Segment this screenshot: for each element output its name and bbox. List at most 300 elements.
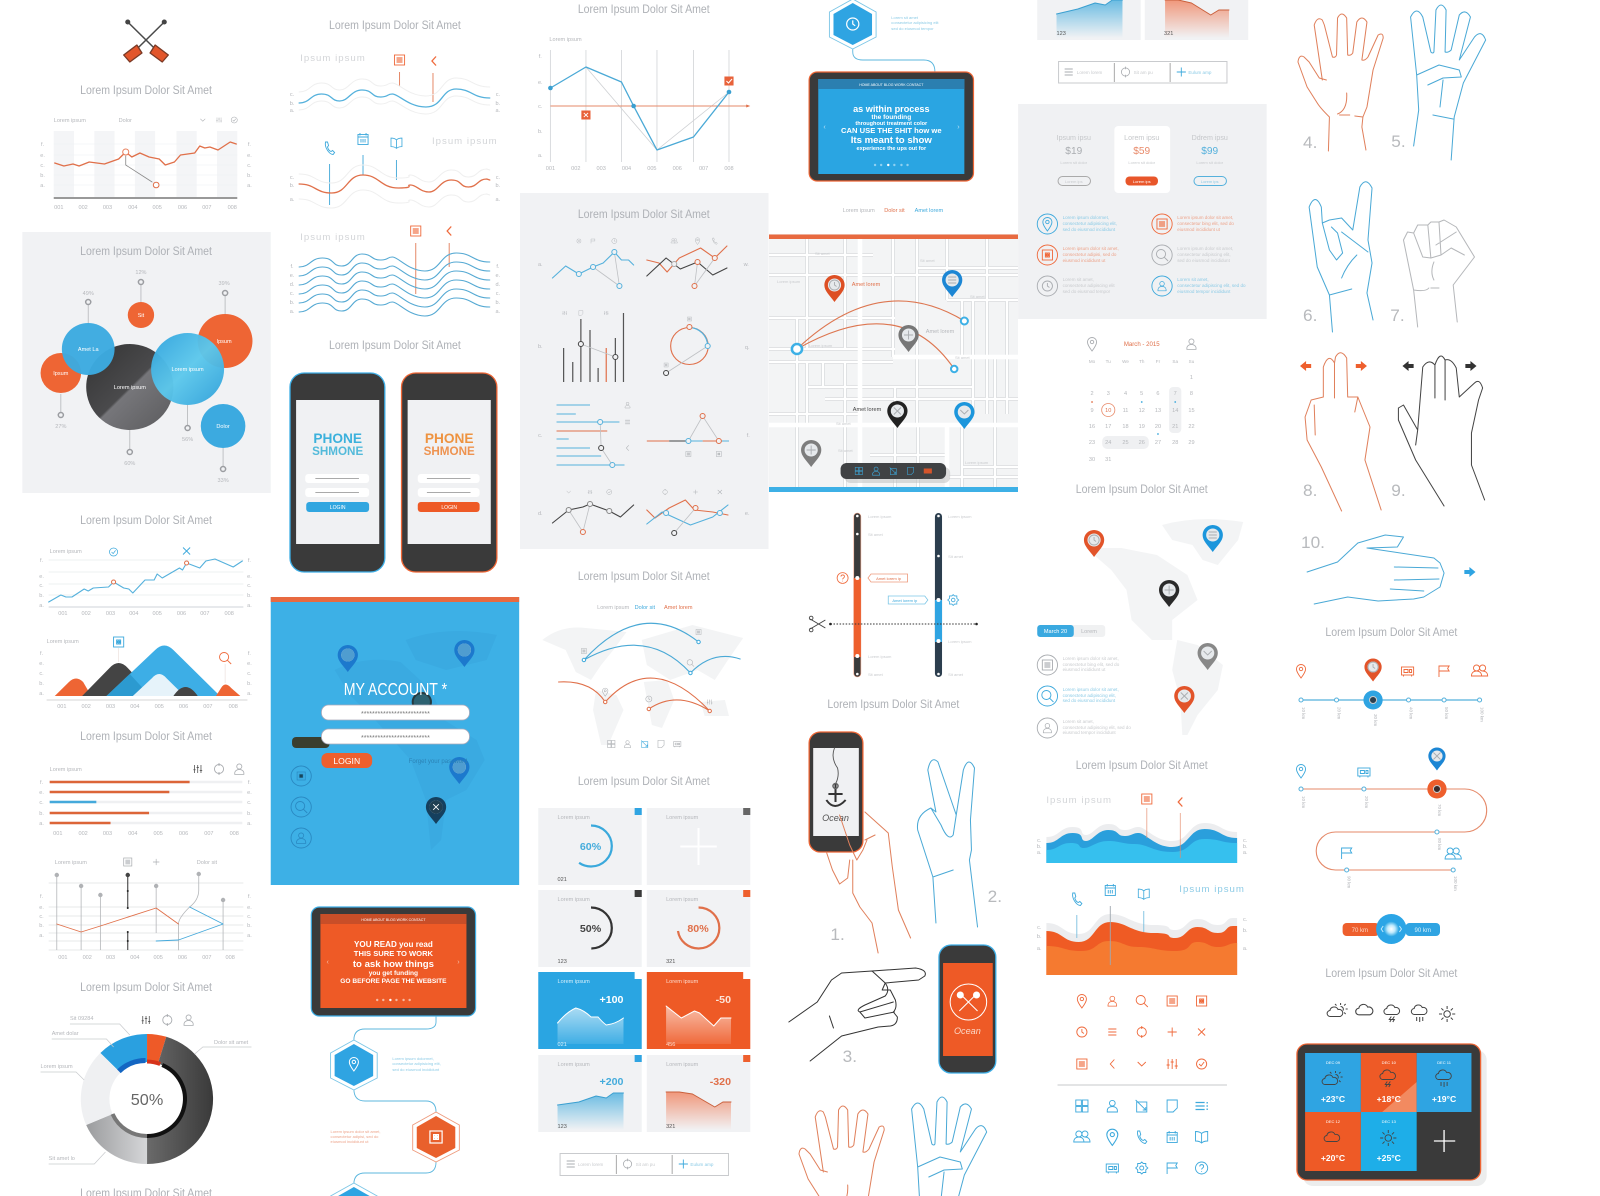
map route arcs — [797, 301, 964, 369]
stat cards grid — [538, 808, 750, 1132]
tablet: orange word cloud: › — [457, 959, 460, 966]
chart: orange line with bands — [40, 117, 252, 211]
card: -50: Lorem ipsum — [666, 979, 699, 985]
gesture 6 hand — [1309, 182, 1373, 332]
chart: orange wave with markers: c. — [290, 175, 295, 181]
calendar: 7 — [1174, 391, 1177, 397]
legend: tablet: Amet lorem — [915, 208, 944, 214]
area chart: orange: c. — [1243, 917, 1248, 923]
tablet: blue word cloud: CAN USE THE SHIT how we — [841, 126, 942, 135]
chart: horizontal bars: c. — [39, 800, 44, 806]
weather cell: Dec 11: +19°C — [1432, 1094, 1456, 1104]
small slider notes: Lorem ipsum — [868, 654, 892, 659]
calendar: Su — [1189, 359, 1195, 364]
area chart: orange: c. — [1037, 925, 1042, 931]
chart: six blue waves: a. — [290, 309, 295, 315]
timeline sliders — [809, 513, 978, 677]
chart: horizontal bars: 002 — [79, 831, 88, 837]
phone: orange ocean: Ocean — [954, 1026, 981, 1036]
chart: mountains — [39, 637, 252, 710]
calendar: 23 — [1089, 440, 1095, 446]
card: 50%: 123 — [558, 959, 567, 965]
login button — [321, 753, 372, 768]
small slider notes: Sit amet — [948, 554, 964, 559]
chart: horizontal bars: 005 — [154, 831, 163, 837]
chart: lollipop lines: e. — [39, 905, 44, 911]
chart: donut 50%: Lorem ipsum — [41, 1064, 73, 1070]
login fields: ************************* — [361, 711, 430, 718]
calendar: 20 — [1155, 424, 1161, 430]
numbers 4 to 7: 6. — [1303, 306, 1317, 325]
chart: blue wave with markers: Ipsum ipsum — [300, 53, 366, 64]
bubble: Lorem ipsum blue — [151, 333, 224, 405]
plan: $19: Lorem ips — [1065, 179, 1083, 184]
slider: orange — [854, 513, 861, 677]
chart: blue trend line: f. — [40, 558, 44, 564]
calendar: 17 — [1105, 424, 1111, 430]
route timeline 1: 100 km — [1480, 707, 1485, 722]
slider: blue — [935, 513, 942, 677]
button bar bottom — [560, 1154, 728, 1176]
chart: orange line with bands: 001 — [54, 205, 63, 211]
card: +200: Lorem ipsum — [558, 1062, 590, 1068]
chart: bubble diagram: 12% — [135, 270, 147, 276]
dashed cut line — [829, 623, 978, 625]
mini chart b: vertical bars: b. — [538, 344, 543, 350]
card: 80%: 80% — [687, 923, 709, 935]
heading: line and mountains: Lorem Ipsum Dolor Sit Amet — [80, 515, 213, 527]
chart: orange line with bands: 007 — [202, 205, 211, 211]
phone: blue login: PHONE — [313, 431, 362, 446]
chart: horizontal bars: f. — [248, 780, 251, 786]
heading: area charts: Lorem Ipsum Dolor Sit Amet — [1076, 760, 1208, 772]
numbers 8 and 9: 8. — [1303, 481, 1317, 500]
hexagon: pin — [331, 1040, 377, 1090]
calendar: 21 — [1172, 424, 1178, 430]
chart: six blue waves — [290, 226, 501, 316]
map base: streets: Sit amet — [815, 251, 831, 256]
chart: orange wave with markers: a. — [290, 197, 295, 203]
map pin: black — [853, 401, 908, 428]
chart: mountains: 006 — [179, 704, 188, 710]
chart: lollipop lines: e. — [247, 905, 252, 911]
phone: orange login — [402, 373, 497, 572]
chart: horizontal bars: 003 — [103, 831, 112, 837]
gesture 10 hand: 10. — [1301, 533, 1325, 552]
calendar: 14 — [1172, 408, 1178, 414]
weather cell: Dec 11: DEC 11 — [1437, 1060, 1452, 1065]
pricing features: consectetur adipisi, sed do — [1063, 252, 1117, 257]
route timeline 2: 20 km — [1364, 796, 1369, 808]
chart: lollipop lines: Lorem ipsum — [55, 860, 87, 866]
route timeline 2: 10 km — [1301, 796, 1306, 808]
map base: streets: Sit amet — [838, 448, 854, 453]
chart: horizontal bars: 006 — [179, 831, 188, 837]
small slider notes: Lorem ipsum — [948, 514, 972, 519]
heading: waves: Lorem Ipsum Dolor Sit Amet — [329, 20, 462, 32]
calendar: 3 — [1107, 391, 1110, 397]
chart: lollipop lines: 002 — [83, 955, 92, 961]
tablet: orange word cloud: ‹ — [327, 959, 330, 966]
hexagon: clock: sed do eiusmod tempor — [891, 26, 934, 31]
map base: streets: Sit amet — [955, 355, 971, 360]
chart: orange line with bands: a. — [247, 183, 252, 189]
mini chart e: e. — [745, 511, 750, 517]
chart: bubble diagram: Amet La — [78, 347, 99, 353]
tablet: blue word cloud: Its meant to show — [851, 135, 932, 146]
heading: world arcs: Lorem Ipsum Dolor Sit Amet — [578, 571, 710, 583]
chart: orange wave with markers: a. — [496, 197, 501, 203]
card: 50% — [538, 890, 642, 967]
map list: eiusmod tempor incididunt — [1063, 730, 1116, 735]
chart: bubble diagram: Dolor — [216, 424, 230, 430]
tablet: orange word cloud: YOU READ you read — [354, 940, 433, 949]
pricing features: eiusmod tempor incididunt — [1177, 289, 1231, 294]
area chart: orange: a. — [1243, 946, 1248, 952]
heading: route: Lorem Ipsum Dolor Sit Amet — [1325, 627, 1458, 639]
small slider notes: Sit amet — [868, 672, 884, 677]
map pin: gray — [898, 325, 955, 352]
tablet: blue word cloud: ‹ — [823, 124, 826, 131]
chart: mountains: f. — [248, 651, 251, 657]
donut segment: gray — [86, 1114, 147, 1164]
bubble: Sit — [128, 302, 154, 328]
card: +100: Lorem ipsum — [558, 979, 590, 985]
calendar: 15 — [1188, 408, 1195, 414]
map silhouette — [542, 625, 743, 745]
button bar bottom: Eulum amp — [690, 1162, 714, 1167]
plan: $59: Lorem sit dolor — [1128, 160, 1156, 165]
map silhouette — [1086, 519, 1243, 735]
pin world map — [1037, 519, 1243, 738]
chart: six blue waves: c. — [290, 291, 295, 297]
chart: horizontal bars: 004 — [128, 831, 137, 837]
map overlay: routes and pins — [792, 270, 974, 483]
chart: donut 50% — [41, 1014, 251, 1164]
chart: bubble diagram: 33% — [218, 478, 229, 484]
route timeline 2 — [1296, 748, 1487, 891]
card: 60%: 021 — [558, 877, 567, 883]
chart: mountains: a. — [39, 691, 44, 697]
chart: mountains: e. — [247, 661, 252, 667]
chart: blue trend line: 007 — [200, 611, 209, 617]
chart: orange line with bands: Dolor — [119, 118, 132, 124]
pricing features: Lorem ipsum dolor sit amet, — [1063, 246, 1119, 251]
tablet: orange word cloud: to ask how things — [353, 959, 434, 970]
mini chart f: triangle: f. — [747, 433, 750, 439]
heading: my account: MY ACCOUNT * — [344, 679, 447, 699]
area chart: orange: b. — [1037, 934, 1042, 940]
gesture 4 hand — [1298, 14, 1383, 151]
mini chart d — [538, 490, 634, 534]
map list: consectetur bing elit, sed do — [1063, 662, 1120, 667]
card: +200: +200 — [600, 1076, 624, 1088]
plan: $59 — [1124, 135, 1159, 186]
icon set: blue — [1074, 1100, 1208, 1174]
calendar: 2 — [1090, 391, 1094, 397]
area chart: blue — [1037, 794, 1248, 863]
weather tablet — [1297, 1044, 1487, 1186]
plan: $99: Lorem sit dolor — [1196, 160, 1224, 165]
tag: orange: Amet lorem ip — [876, 576, 902, 581]
calendar: 30 — [1089, 457, 1095, 463]
pricing features: Lorem ipsum dolor sit amet, — [1177, 215, 1233, 220]
chart: orange line with bands: f. — [248, 142, 251, 148]
calendar: 31 — [1105, 457, 1111, 463]
heading: column 3 top: Lorem Ipsum Dolor Sit Amet — [578, 4, 710, 16]
card: add: Lorem ipsum — [666, 815, 699, 821]
card: -320: Lorem ipsum — [666, 1062, 699, 1068]
chart: blue trend line: 005 — [153, 611, 162, 617]
text: hexagon grid: Lorem ipsum dolor sit amet, — [331, 1129, 380, 1134]
plan: $59: Lorem ipsu — [1124, 135, 1159, 142]
gesture 1: phone in hand: Ocean — [822, 813, 849, 823]
mini chart q: ring — [664, 317, 750, 376]
tablet: orange word cloud: you get funding — [369, 970, 418, 977]
card: add — [647, 808, 750, 885]
chart: lollipop lines: b. — [247, 923, 252, 929]
calendar: 1 — [1190, 375, 1193, 381]
mini chart c: bars — [538, 402, 630, 468]
chart: lollipop lines: f. — [40, 894, 44, 900]
chart: blue trend line: Lorem ipsum — [50, 549, 82, 555]
panel: pricing background — [1018, 104, 1267, 319]
chart: donut 50%: Sit amet lo — [49, 1156, 75, 1162]
map base: streets — [769, 234, 1018, 492]
heading: phones: Lorem Ipsum Dolor Sit Amet — [329, 340, 462, 352]
chart: horizontal bars: f. — [40, 780, 44, 786]
text: hexagon grid: eiusmod incididunt ut — [331, 1139, 369, 1144]
chart: six blue waves: d. — [290, 282, 295, 288]
calendar: 4 — [1124, 391, 1127, 397]
chart: lollipop lines: a. — [39, 933, 44, 939]
chart: blue wave with markers: b. — [496, 101, 501, 107]
heading: bars: Lorem Ipsum Dolor Sit Amet — [80, 731, 213, 743]
weather cell: Dec 10: +18°C — [1377, 1094, 1401, 1104]
calendar: 27 — [1155, 440, 1161, 446]
button bar top: Eulum amp — [1188, 70, 1212, 75]
map pin: blue lower — [954, 402, 974, 429]
donut segment: light — [81, 1053, 120, 1125]
weather cell: Dec 09: +23°C — [1321, 1094, 1345, 1104]
map pin: gray lower — [801, 440, 821, 467]
text: hexagon pin — [392, 1056, 441, 1072]
weather cell: Dec 10 — [1361, 1053, 1417, 1112]
mini chart f: triangle — [647, 414, 750, 456]
login fields — [321, 705, 469, 744]
bubble: Ipsum right — [198, 314, 252, 368]
stat cards top repeat: 123 — [1057, 31, 1066, 37]
chart: bubble diagram: Lorem ipsum — [114, 385, 146, 391]
map base: streets: Lorem ipsum — [809, 343, 833, 348]
area chart: orange: b. — [1243, 928, 1248, 934]
area chart: blue: b. — [1037, 844, 1042, 850]
map base: streets: Lorem ipsum — [965, 460, 989, 465]
chart: mountains: Lorem ipsum — [47, 639, 79, 645]
hexagon: clock: consectetur adipisicing elit — [891, 20, 939, 25]
tablet: orange word cloud: THIS SURE TO WORK — [354, 949, 434, 958]
map list: eiusmod incididunt ut — [1063, 667, 1106, 672]
gesture 9 hand with arrows — [1398, 356, 1485, 506]
pricing features: consectetur bing elit, sed do — [1177, 221, 1234, 226]
card: +200 — [538, 1055, 642, 1132]
chart: orange line with bands: 006 — [178, 205, 187, 211]
card: +100: +100 — [600, 994, 624, 1006]
bubble: Lorem ipsum dark — [86, 344, 173, 430]
heading: pin map: Lorem Ipsum Dolor Sit Amet — [1076, 484, 1208, 496]
plan: $19: Ipsum ipsu — [1057, 135, 1091, 142]
map tabs: Lorem — [1081, 629, 1097, 635]
chart: orange wave with markers: c. — [496, 175, 501, 181]
heading: chart set: Lorem Ipsum Dolor Sit Amet — [578, 209, 710, 221]
map base: streets: Sit amet — [970, 294, 986, 299]
chart: donut 50%: Amet dolar — [52, 1031, 79, 1037]
tag: blue — [888, 596, 928, 604]
weather cell: Dec 12: DEC 12 — [1326, 1119, 1341, 1124]
gesture 5 hand — [1411, 5, 1486, 160]
calendar: 19 — [1139, 424, 1145, 430]
chart: orange line with bands: e. — [247, 153, 252, 159]
calendar: 28 — [1172, 440, 1178, 446]
chart: mountains: 004 — [130, 704, 139, 710]
heading: donut: Lorem Ipsum Dolor Sit Amet — [80, 982, 213, 994]
gesture 8 hand with arrows — [1300, 353, 1381, 511]
chart: lollipop lines: 001 — [58, 955, 68, 961]
tablet: orange word cloud — [311, 907, 476, 1016]
mini chart q: ring: q. — [745, 345, 750, 351]
small slider notes: Lorem ipsum — [868, 514, 892, 519]
chart: column 3 top line: 002 — [571, 166, 580, 172]
calendar: 22 — [1188, 424, 1195, 430]
heading: weather: Lorem Ipsum Dolor Sit Amet — [1325, 968, 1458, 980]
plan: $99: $99 — [1201, 146, 1219, 157]
heading: bubbles: Lorem Ipsum Dolor Sit Amet — [80, 246, 213, 258]
chart: mountains: 003 — [106, 704, 115, 710]
legend: tablet — [843, 208, 944, 214]
columns five and six — [1037, 0, 1488, 1186]
weather cell: Dec 13: +25°C — [1377, 1153, 1401, 1163]
mini chart a — [538, 238, 634, 288]
pricing features: sed do eiusmod tempor — [1063, 289, 1111, 294]
chart: column 3 top line: 005 — [647, 166, 657, 172]
chart: mountains: f. — [40, 651, 44, 657]
chart: lollipop lines: 007 — [202, 955, 211, 961]
plan: $99: Ddrem ipsu — [1192, 135, 1228, 142]
mini chart a: a. — [538, 262, 543, 268]
mini chart c: bars: c. — [538, 433, 543, 439]
chart: blue trend line: f. — [248, 558, 251, 564]
calendar: Tu — [1106, 359, 1111, 364]
world map with arcs: Dolor sit — [635, 605, 656, 611]
chart: column 3 top line — [538, 37, 750, 172]
weather cell: Dec 09 — [1305, 1053, 1361, 1112]
weather cell: Dec 10: DEC 10 — [1382, 1060, 1397, 1065]
numbers 4 to 7 — [1303, 132, 1406, 325]
plan: $19: $19 — [1065, 146, 1083, 157]
chart: blue trend line: 002 — [82, 611, 91, 617]
map list: consectetur adipiscing elit, sed do — [1063, 725, 1131, 730]
login fields: ************************* — [361, 735, 430, 742]
chart: blue wave with markers: c. — [290, 92, 295, 98]
tablet: orange word cloud: GO BEFORE PAGE THE WEBSITE — [340, 978, 447, 985]
map pin: blue — [942, 270, 962, 297]
chart: mountains: 008 — [229, 704, 238, 710]
route timeline 2: 100 km — [1453, 876, 1458, 891]
card: 50%: Lorem ipsum — [558, 897, 590, 903]
calendar: 26 — [1139, 440, 1145, 446]
chart: horizontal bars: a. — [39, 821, 44, 827]
gesture 5 repeated bottom — [912, 1097, 987, 1196]
calendar: Sa — [1172, 359, 1178, 364]
map route nodes — [792, 318, 968, 372]
text: hexagon pin: consectetur adipisicing elit, — [392, 1061, 441, 1066]
chart: bubble diagram: 27% — [55, 424, 66, 430]
chart: mountains: 007 — [203, 704, 213, 710]
chart: six blue waves: a. — [496, 309, 501, 315]
chart: horizontal bars: b. — [247, 811, 252, 817]
route timeline 1 — [1296, 658, 1488, 726]
text: hexagon grid — [331, 1129, 380, 1144]
map pin: gray: Amet lorem — [926, 329, 955, 335]
route timeline 1: 10 km — [1301, 707, 1306, 719]
small slider notes: Sit amet — [948, 672, 964, 677]
chart: bubble diagram: Lorem ipsum — [172, 367, 204, 373]
chart: column 3 top line: c. — [538, 104, 543, 110]
small slider notes — [868, 514, 972, 677]
card: -320: -320 — [710, 1076, 731, 1088]
chart: orange line with bands: 005 — [153, 205, 162, 211]
chart: blue trend line: 001 — [58, 611, 68, 617]
card: 60%: 60% — [580, 841, 602, 853]
chart: mountains: 005 — [155, 704, 164, 710]
chart: orange line with bands: c. — [40, 163, 45, 169]
card: -320 — [647, 1055, 750, 1132]
icon: scissors — [809, 616, 825, 632]
plan: $19: Lorem sit dolor — [1060, 160, 1088, 165]
route timeline 2: 90 km — [1347, 876, 1352, 888]
calendar: Fr — [1156, 359, 1161, 364]
chart: six blue waves: b. — [290, 300, 295, 306]
chart: blue trend line: b. — [247, 593, 252, 599]
calendar: 13 — [1155, 408, 1161, 414]
chart: blue trend line: e. — [39, 574, 44, 580]
stat cards top repeat — [1037, 0, 1248, 40]
tablet: blue word cloud: experience the ups out for — [856, 146, 927, 152]
calendar: 5 — [1140, 391, 1143, 397]
calendar: 29 — [1188, 440, 1195, 446]
weather icons — [1327, 1003, 1455, 1022]
panel: chart set background — [520, 193, 769, 549]
card: +100: 021 — [558, 1042, 567, 1048]
chart: orange line with bands: b. — [40, 173, 45, 179]
map pin: orange — [824, 275, 881, 302]
chart: orange line with bands: f. — [41, 142, 45, 148]
chart: blue trend line: c. — [247, 583, 252, 589]
donut segment: blue — [100, 1034, 147, 1073]
button bar top: Sit am pu — [1134, 70, 1153, 75]
gesture 7 fist — [1403, 220, 1474, 327]
login map silhouette — [335, 631, 497, 850]
chart: blue trend line: 003 — [106, 611, 115, 617]
text: hexagon pin: Lorem ipsum dolormet, — [392, 1056, 434, 1061]
chart: lollipop lines — [39, 858, 252, 961]
chart: orange line with bands: 003 — [103, 205, 112, 211]
calendar: 25 — [1122, 440, 1129, 446]
tag: blue: Amet lorem ip — [892, 598, 918, 603]
columns three and four — [520, 0, 1267, 1196]
phone: orange login: PHONE — [425, 431, 474, 446]
text: hexagon pin: sed do eiusmod incididunt — [392, 1067, 440, 1072]
